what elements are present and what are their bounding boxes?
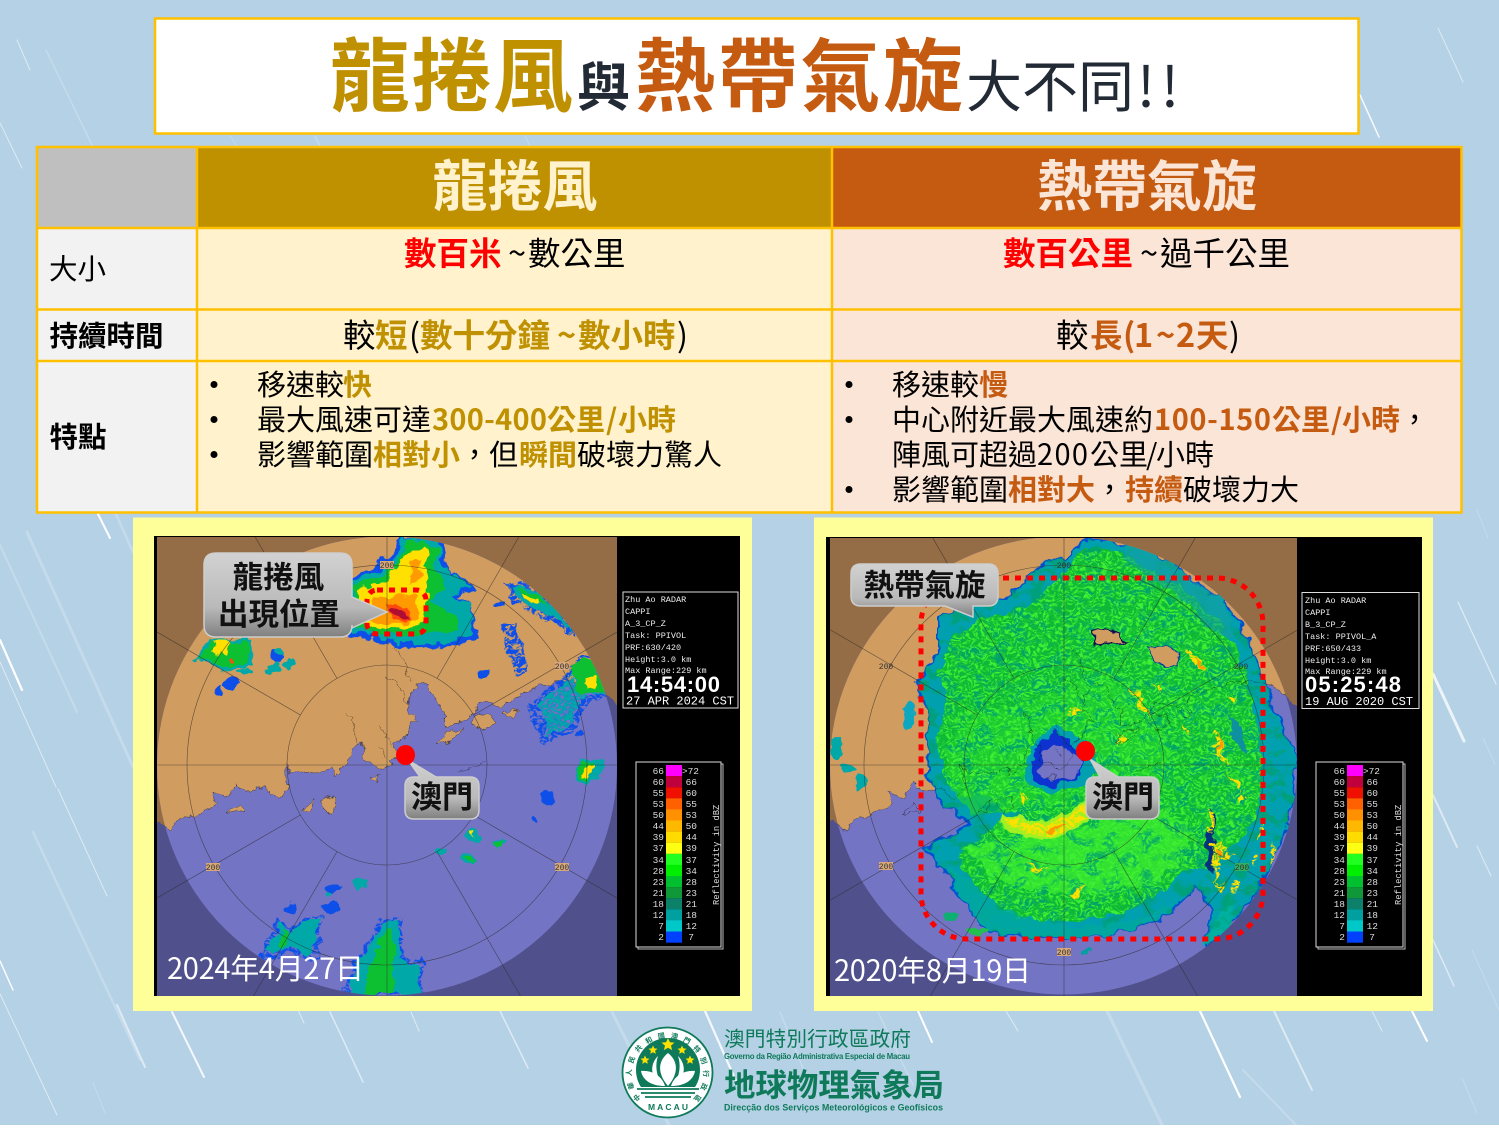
radar map: tornado case xyxy=(157,537,617,996)
reflectivity colour legend: 18 xyxy=(653,899,664,910)
title text xyxy=(330,13,1179,129)
reflectivity colour legend: 23 xyxy=(1334,877,1345,888)
cyclone feature list: 持續 xyxy=(1125,467,1183,509)
tornado size: 數公里 xyxy=(528,228,626,275)
reflectivity colour legend: 23 xyxy=(1367,888,1378,899)
cyclone feature list: 相對大 xyxy=(1008,467,1095,509)
radar map: tropical cyclone case xyxy=(830,538,1297,996)
range labels: 200 xyxy=(879,863,893,872)
reflectivity colour legend: 50 xyxy=(1367,821,1378,832)
reflectivity colour legend: 12 xyxy=(1334,910,1345,921)
reflectivity colour legend: 21 xyxy=(1334,888,1345,899)
date label: tornado case: 2024年4月27日 xyxy=(167,946,364,988)
callout: tornado location: 出現位置 xyxy=(218,590,340,634)
radar info box: Zhu Ao RADAR xyxy=(625,595,686,605)
tornado size: ~ xyxy=(508,228,526,275)
table header: tropical cyclone: 熱帶氣旋 xyxy=(1037,142,1257,222)
logo text: government and bureau names: 澳門特別行政區政府 xyxy=(724,1022,911,1052)
tornado duration: ( xyxy=(409,310,420,357)
reflectivity colour legend: 53 xyxy=(1334,799,1345,810)
reflectivity colour legend: 44 xyxy=(686,832,697,843)
reflectivity colour legend: 39 xyxy=(686,843,697,854)
range labels xyxy=(879,562,1249,958)
reflectivity colour legend: 66 xyxy=(1367,777,1378,788)
tornado duration: 數小時 xyxy=(578,310,676,357)
reflectivity colour legend: 39 xyxy=(653,832,664,843)
tornado feature list: 300-400 xyxy=(432,397,547,439)
tornado feature list: 相對小 xyxy=(373,432,460,474)
reflectivity colour legend: 55 xyxy=(686,799,697,810)
tornado feature list xyxy=(210,362,722,474)
radar info box: CAPPI xyxy=(625,607,651,617)
range labels: 200 xyxy=(206,864,220,873)
reflectivity colour legend: 55 xyxy=(653,788,664,799)
cyclone feature list: / xyxy=(1331,397,1342,439)
callout: tornado location: 龍捲風 xyxy=(233,553,324,597)
comparison table xyxy=(37,142,1462,512)
reflectivity colour legend xyxy=(1316,762,1405,949)
reflectivity colour legend: 44 xyxy=(1334,821,1345,832)
reflectivity colour legend: 34 xyxy=(653,855,664,866)
cyclone size: 數百公里 xyxy=(1003,228,1133,275)
radar info box: Max Range:229 km xyxy=(625,666,707,676)
range labels: 200 xyxy=(555,864,569,873)
range labels: 200 xyxy=(1235,864,1249,873)
reflectivity colour legend: 60 xyxy=(653,777,664,788)
tornado size: 數百米 xyxy=(404,228,502,275)
dashed outline: cyclone extent xyxy=(921,578,1263,939)
tornado feature list: 最大風速可達 xyxy=(257,397,431,439)
cyclone duration: 天 xyxy=(1196,310,1229,357)
reflectivity colour legend: 28 xyxy=(1367,877,1378,888)
cyclone feature list: 陣風可超過 xyxy=(892,432,1037,474)
panel: tropical cyclone radar image xyxy=(814,518,1433,1011)
tornado feature list: 移速較 xyxy=(257,362,344,404)
radar info box: 27 APR 2024 CST xyxy=(626,694,734,708)
tornado duration: ~ xyxy=(557,310,576,357)
radar info box: Task: PPIVOL xyxy=(625,631,686,641)
tornado feature list: 快 xyxy=(343,362,372,404)
tornado feature list: 破壞力驚人 xyxy=(577,432,722,474)
reflectivity colour legend: 60 xyxy=(1367,788,1378,799)
cyclone duration: 1 xyxy=(1134,310,1153,357)
title text: !! xyxy=(1137,43,1179,124)
table cell backgrounds xyxy=(37,147,1461,512)
radar info box: PRF:630/420 xyxy=(625,643,681,653)
radar info box: Zhu Ao RADAR xyxy=(1305,596,1366,606)
radar info box: B_3_CP_Z xyxy=(1305,620,1346,630)
callout: Macau: 澳門 xyxy=(1092,772,1154,817)
radar info box xyxy=(1302,592,1419,709)
reflectivity colour legend: 39 xyxy=(1334,832,1345,843)
radar info box: A_3_CP_Z xyxy=(625,619,666,629)
tornado feature list: 公里 xyxy=(547,397,605,439)
reflectivity colour legend: 66 xyxy=(653,766,664,777)
callout: tropical cyclone: 熱帶氣旋 xyxy=(864,561,986,605)
radar info box: Height:3.0 km xyxy=(1305,656,1371,666)
cyclone feature list: / xyxy=(1146,432,1157,474)
reflectivity colour legend: 12 xyxy=(653,910,664,921)
reflectivity colour legend: Reflectivity in dBZ xyxy=(712,805,722,905)
reflectivity colour legend: 28 xyxy=(653,866,664,877)
reflectivity colour legend: 18 xyxy=(686,910,697,921)
reflectivity colour legend: 34 xyxy=(1367,866,1378,877)
radar echoes: tornado storm and showers xyxy=(194,537,610,997)
reflectivity colour legend: 2 xyxy=(658,932,664,943)
date label: cyclone case: 2020年8月19日 xyxy=(834,948,1031,990)
cyclone feature list: 移速較 xyxy=(892,362,979,404)
title box xyxy=(155,13,1358,134)
range labels: 200 xyxy=(879,663,893,672)
reflectivity colour legend: 55 xyxy=(1367,799,1378,810)
reflectivity colour legend: 28 xyxy=(1334,866,1345,877)
cyclone feature list: 小時 xyxy=(1342,397,1400,439)
reflectivity colour legend: 44 xyxy=(653,821,664,832)
title text: 與 xyxy=(577,46,630,122)
cyclone duration: 長 xyxy=(1090,310,1123,357)
reflectivity colour legend: 2 xyxy=(1339,932,1345,943)
radar info box: Task: PPIVOL_A xyxy=(1305,632,1377,642)
reflectivity colour legend: 23 xyxy=(653,877,664,888)
reflectivity colour legend: >72 xyxy=(1363,766,1380,777)
range labels: 200 xyxy=(555,663,569,672)
dashed marker: tornado location xyxy=(367,590,426,634)
reflectivity colour legend: 50 xyxy=(686,821,697,832)
logo text: government and bureau names: Governo da Região Administrativa Especial de Macau xyxy=(724,1052,910,1061)
radar info box: Height:3.0 km xyxy=(625,655,691,665)
reflectivity colour legend: 28 xyxy=(686,877,697,888)
radar info box: PRF:650/433 xyxy=(1305,644,1361,654)
range labels: 200 xyxy=(1057,562,1071,571)
cyclone feature list: ， xyxy=(1400,397,1429,439)
cyclone feature list: 小時 xyxy=(1156,432,1214,474)
cyclone duration: 2 xyxy=(1176,310,1195,357)
reflectivity colour legend: 44 xyxy=(1367,832,1378,843)
radar info box: 14:54:00 xyxy=(627,672,720,697)
table header: tornado: 龍捲風 xyxy=(432,142,598,222)
cyclone feature list xyxy=(846,362,1429,509)
radar info box: 05:25:48 xyxy=(1305,672,1401,697)
reflectivity colour legend: 37 xyxy=(686,855,697,866)
panel: tornado radar image xyxy=(133,518,752,1011)
reflectivity colour legend: >72 xyxy=(682,766,699,777)
tornado duration: ) xyxy=(677,310,688,357)
reflectivity colour legend: 37 xyxy=(1334,843,1345,854)
cyclone feature list: 200 xyxy=(1037,432,1088,474)
tornado duration: 較 xyxy=(343,310,376,357)
logo text: government and bureau names xyxy=(724,1022,944,1112)
row label: features: 特點 xyxy=(50,415,107,456)
reflectivity colour legend xyxy=(636,762,723,949)
reflectivity colour legend: 18 xyxy=(1334,899,1345,910)
row label: duration: 持續時間 xyxy=(50,314,164,355)
callout: Macau xyxy=(1086,759,1159,819)
reflectivity colour legend: 18 xyxy=(1367,910,1378,921)
tornado feature list: / xyxy=(606,397,617,439)
cyclone size: ~ xyxy=(1140,228,1158,275)
title text: 熱帶氣旋 xyxy=(635,13,963,129)
logo text: government and bureau names: Direcção dos Serviços Meteorológicos e Geofísicos xyxy=(724,1102,943,1112)
reflectivity colour legend: 34 xyxy=(686,866,697,877)
tornado duration: 短 xyxy=(375,310,408,357)
reflectivity colour legend: 7 xyxy=(1369,932,1375,943)
title text: 大不同 xyxy=(966,43,1134,124)
callout: tropical cyclone xyxy=(851,561,998,617)
reflectivity colour legend: 37 xyxy=(1367,855,1378,866)
reflectivity colour legend: Reflectivity in dBZ xyxy=(1394,805,1404,905)
reflectivity colour legend: 37 xyxy=(653,843,664,854)
coastlines over echoes xyxy=(838,648,1286,832)
cyclone rain echoes xyxy=(830,535,1296,954)
marker: Macau red dot xyxy=(396,745,415,765)
radar info box: 19 AUG 2020 CST xyxy=(1305,695,1413,709)
reflectivity colour legend: 53 xyxy=(653,799,664,810)
radar info box xyxy=(623,592,738,708)
row label: size: 大小 xyxy=(49,247,106,288)
cyclone duration: 較 xyxy=(1056,310,1089,357)
cyclone duration: ) xyxy=(1229,310,1240,357)
reflectivity colour legend: 7 xyxy=(688,932,694,943)
cyclone duration: ( xyxy=(1123,310,1135,357)
reflectivity colour legend: 12 xyxy=(686,921,697,932)
cyclone duration: ~ xyxy=(1156,310,1175,357)
tornado feature list: 小時 xyxy=(618,397,676,439)
range labels: 200 xyxy=(380,562,394,571)
radar info box: Max Range:229 km xyxy=(1305,667,1387,677)
tornado feature list: 影響範圍 xyxy=(257,432,373,474)
reflectivity colour legend: 66 xyxy=(1334,766,1345,777)
reflectivity colour legend: 39 xyxy=(1367,843,1378,854)
reflectivity colour legend: 21 xyxy=(1367,899,1378,910)
cyclone feature list: 100-150 xyxy=(1154,397,1271,439)
reflectivity colour legend: 53 xyxy=(1367,810,1378,821)
logo: Macau emblem: MACAU xyxy=(648,1102,688,1112)
title text: 龍捲風 xyxy=(330,13,573,129)
logo: Macau emblem: 中華人民共和國澳門特別行政區 xyxy=(626,1032,710,1102)
radar info box: CAPPI xyxy=(1305,608,1331,618)
reflectivity colour legend: 7 xyxy=(1339,921,1345,932)
reflectivity colour legend: 7 xyxy=(658,921,664,932)
cyclone feature list: 公里 xyxy=(1090,432,1148,474)
tornado duration: 數十分鐘 xyxy=(420,310,550,357)
callout: Macau: 澳門 xyxy=(411,772,473,817)
reflectivity colour legend: 23 xyxy=(686,888,697,899)
tornado feature list: ，但 xyxy=(460,432,518,474)
reflectivity colour legend: 12 xyxy=(1367,921,1378,932)
cyclone feature list: ， xyxy=(1095,467,1124,509)
callout: tornado location xyxy=(204,553,387,637)
reflectivity colour legend: 21 xyxy=(653,888,664,899)
reflectivity colour legend: 50 xyxy=(1334,810,1345,821)
cyclone feature list: 公里 xyxy=(1272,397,1330,439)
cyclone feature list: 慢 xyxy=(979,362,1008,404)
cyclone feature list: 破壞力大 xyxy=(1183,467,1299,509)
marker: Macau red dot xyxy=(1076,741,1095,761)
reflectivity colour legend: 66 xyxy=(686,777,697,788)
logo text: government and bureau names: 地球物理氣象局 xyxy=(724,1060,944,1106)
reflectivity colour legend: 55 xyxy=(1334,788,1345,799)
range labels xyxy=(206,561,569,873)
range labels: 200 xyxy=(1057,949,1071,958)
cyclone feature list: 影響範圍 xyxy=(892,467,1008,509)
reflectivity colour legend: 50 xyxy=(653,810,664,821)
reflectivity colour legend: 60 xyxy=(1334,777,1345,788)
reflectivity colour legend: 21 xyxy=(686,899,697,910)
cyclone feature list: 中心附近最大風速約 xyxy=(892,397,1153,439)
reflectivity colour legend: 53 xyxy=(686,810,697,821)
range labels: 200 xyxy=(1234,663,1248,672)
reflectivity colour legend: 34 xyxy=(1334,855,1345,866)
callout: Macau xyxy=(405,760,479,819)
cyclone size: 過千公里 xyxy=(1160,228,1290,275)
reflectivity colour legend: 60 xyxy=(686,788,697,799)
tornado feature list: 瞬間 xyxy=(519,432,577,474)
